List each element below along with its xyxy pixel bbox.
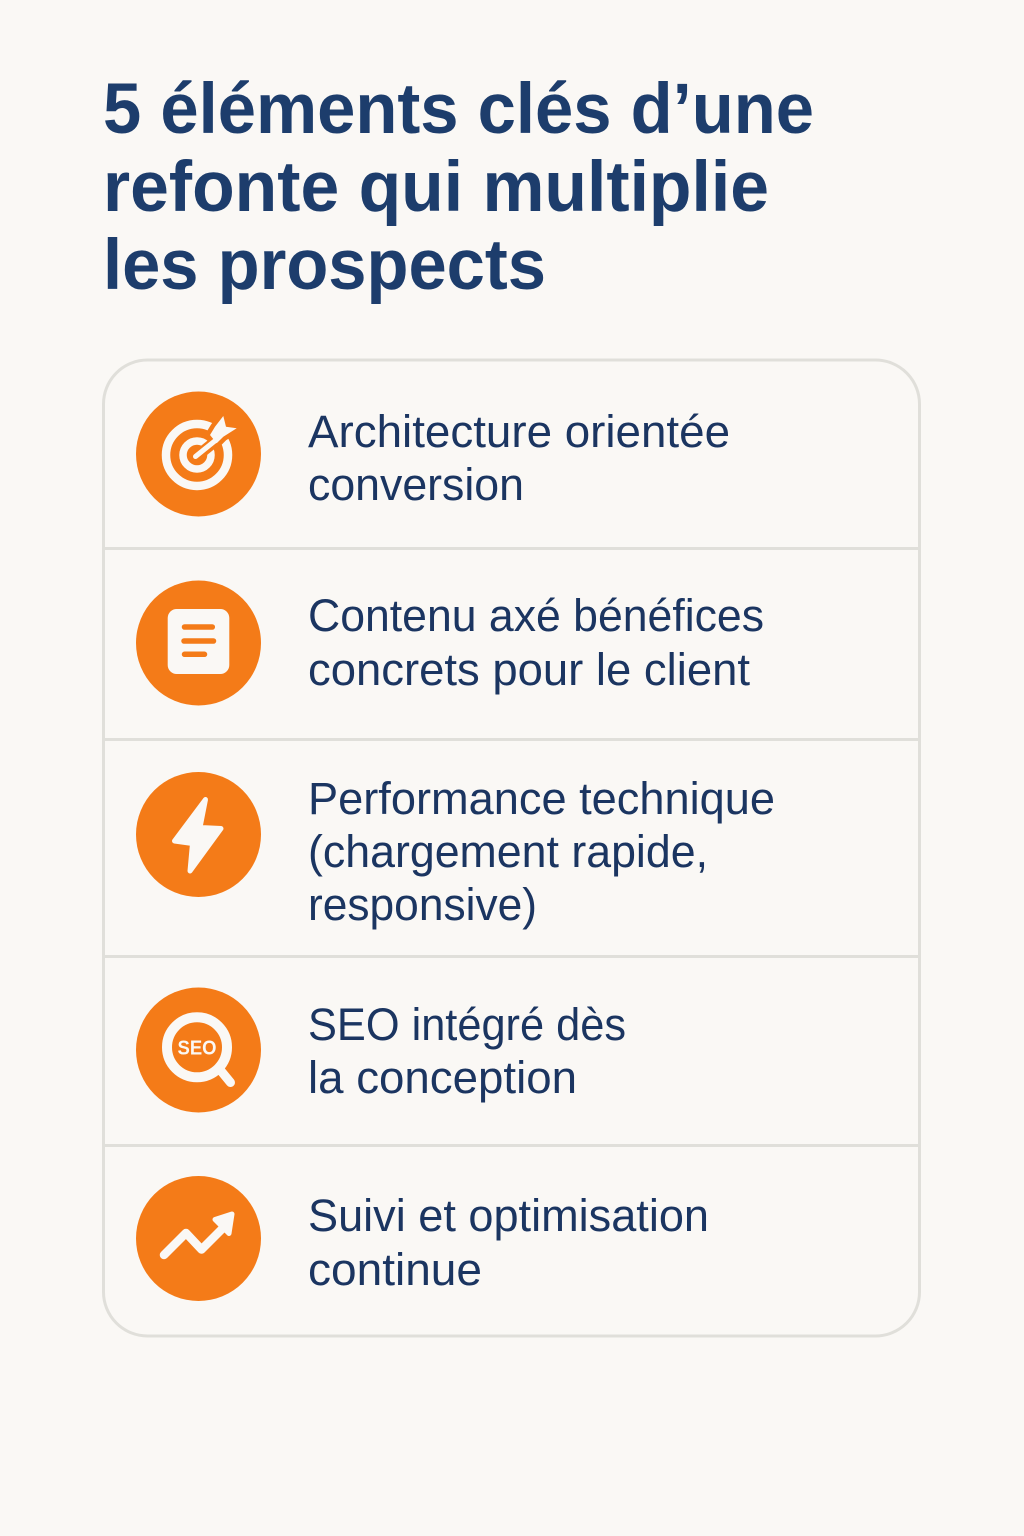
text: architecture: conversion (308, 459, 524, 510)
row 5: suivi (136, 1176, 709, 1301)
text: architecture: Architecture orientée (308, 406, 730, 457)
row 3: performance (136, 772, 775, 930)
title: refonte qui multiplie (103, 148, 769, 227)
row 1: architecture (136, 392, 730, 516)
icon: target with arrow (136, 392, 261, 516)
text: performance: responsive) (308, 879, 537, 930)
text: performance: Performance technique (308, 773, 775, 824)
text: performance: (chargement rapide, (308, 826, 708, 877)
text: seo (308, 999, 626, 1103)
icon: SEO magnifier (136, 988, 261, 1112)
row 4: seo (136, 988, 626, 1112)
title (103, 70, 814, 305)
text: suivi: Suivi et optimisation (308, 1190, 709, 1241)
icon: rising trend arrow (136, 1176, 261, 1301)
text: contenu: concrets pour le client (308, 644, 751, 695)
text: suivi (308, 1190, 709, 1295)
title: les prospects (103, 226, 546, 305)
text: suivi: continue (308, 1244, 482, 1295)
icon: document (136, 580, 261, 706)
text: contenu: Contenu axé bénéfices (308, 590, 764, 641)
panel: list of five elements (104, 360, 920, 1336)
icon: lightning bolt (136, 772, 261, 897)
text: seo: SEO intégré dès (308, 999, 626, 1050)
text: performance (308, 773, 775, 930)
row 2: contenu (136, 580, 764, 706)
title: 5 éléments clés d’une (103, 70, 814, 149)
text: contenu (308, 590, 764, 695)
text: architecture (308, 406, 730, 510)
text: seo: la conception (308, 1052, 577, 1103)
icon: SEO magnifier: SEO (178, 1038, 216, 1060)
